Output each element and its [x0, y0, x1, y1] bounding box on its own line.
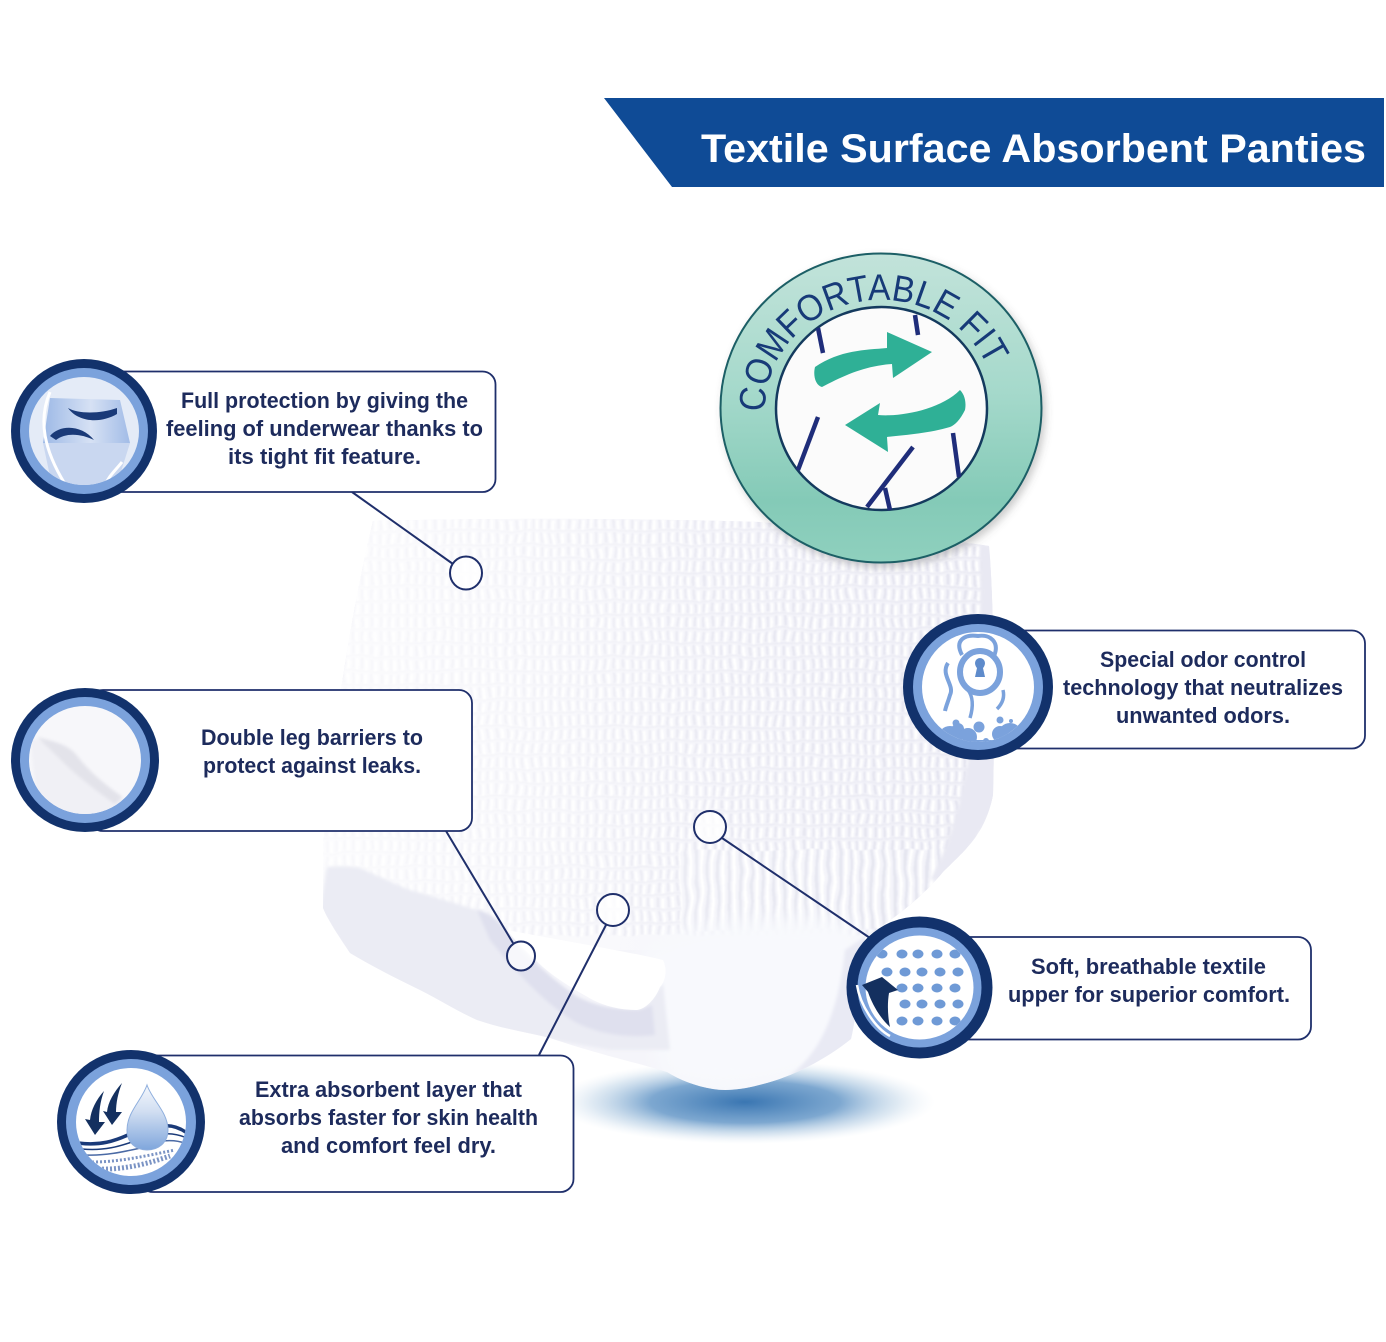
description: upper for superior comfort. [1008, 982, 1290, 1007]
badge inner circle [776, 307, 987, 510]
description: protect against leaks. [203, 753, 421, 778]
description: its tight fit feature. [228, 444, 421, 469]
badge: comfortable fit [719, 252, 1049, 571]
description: absorbs faster for skin health [239, 1105, 538, 1130]
description: feeling of underwear thanks to [166, 416, 483, 441]
description: unwanted odors. [1116, 703, 1290, 728]
callout: breathable textile [846, 916, 1311, 1058]
description [166, 388, 483, 469]
text box [140, 1056, 574, 1192]
text box [925, 937, 1311, 1040]
description: Full protection by giving the [181, 388, 468, 413]
connector: absorbent layer [539, 894, 629, 1055]
floor shadow under garment [555, 1060, 935, 1144]
text box [90, 372, 496, 492]
description [1063, 647, 1343, 728]
body outline figure [798, 315, 959, 510]
callout: full protection [11, 359, 496, 503]
connector: leg barriers [446, 831, 535, 970]
title banner [604, 98, 1384, 187]
icon: absorption drop [57, 1050, 205, 1194]
icon: leg barrier [11, 688, 159, 832]
icon: breathable dots [846, 916, 992, 1058]
text box [980, 630, 1365, 748]
callout: absorbent layer [57, 1050, 574, 1194]
badge curved label: COMFORTABLE FIT [740, 274, 1010, 410]
arrow: teal left [845, 390, 965, 452]
description: Soft, breathable textile [1031, 954, 1266, 979]
description: Special odor control [1100, 647, 1306, 672]
title banner: Textile Surface Absorbent Panties [701, 127, 1366, 171]
description: Double leg barriers to [201, 725, 423, 750]
connector: protection [352, 492, 482, 590]
callout: odor control [903, 614, 1365, 760]
description [239, 1077, 538, 1158]
icon: odor lock [903, 614, 1053, 760]
text box [90, 690, 472, 831]
description [1008, 954, 1290, 1007]
description: technology that neutralizes [1063, 675, 1343, 700]
arrow: teal right [814, 332, 932, 387]
callout: leg barriers [11, 688, 472, 832]
icon: underwear fit [11, 359, 157, 503]
connector: textile upper [694, 811, 870, 938]
absorbent panties garment [310, 510, 1010, 1100]
description: and comfort feel dry. [281, 1133, 496, 1158]
badge outer ring [720, 254, 1042, 562]
description: Extra absorbent layer that [255, 1077, 523, 1102]
description [201, 725, 423, 778]
